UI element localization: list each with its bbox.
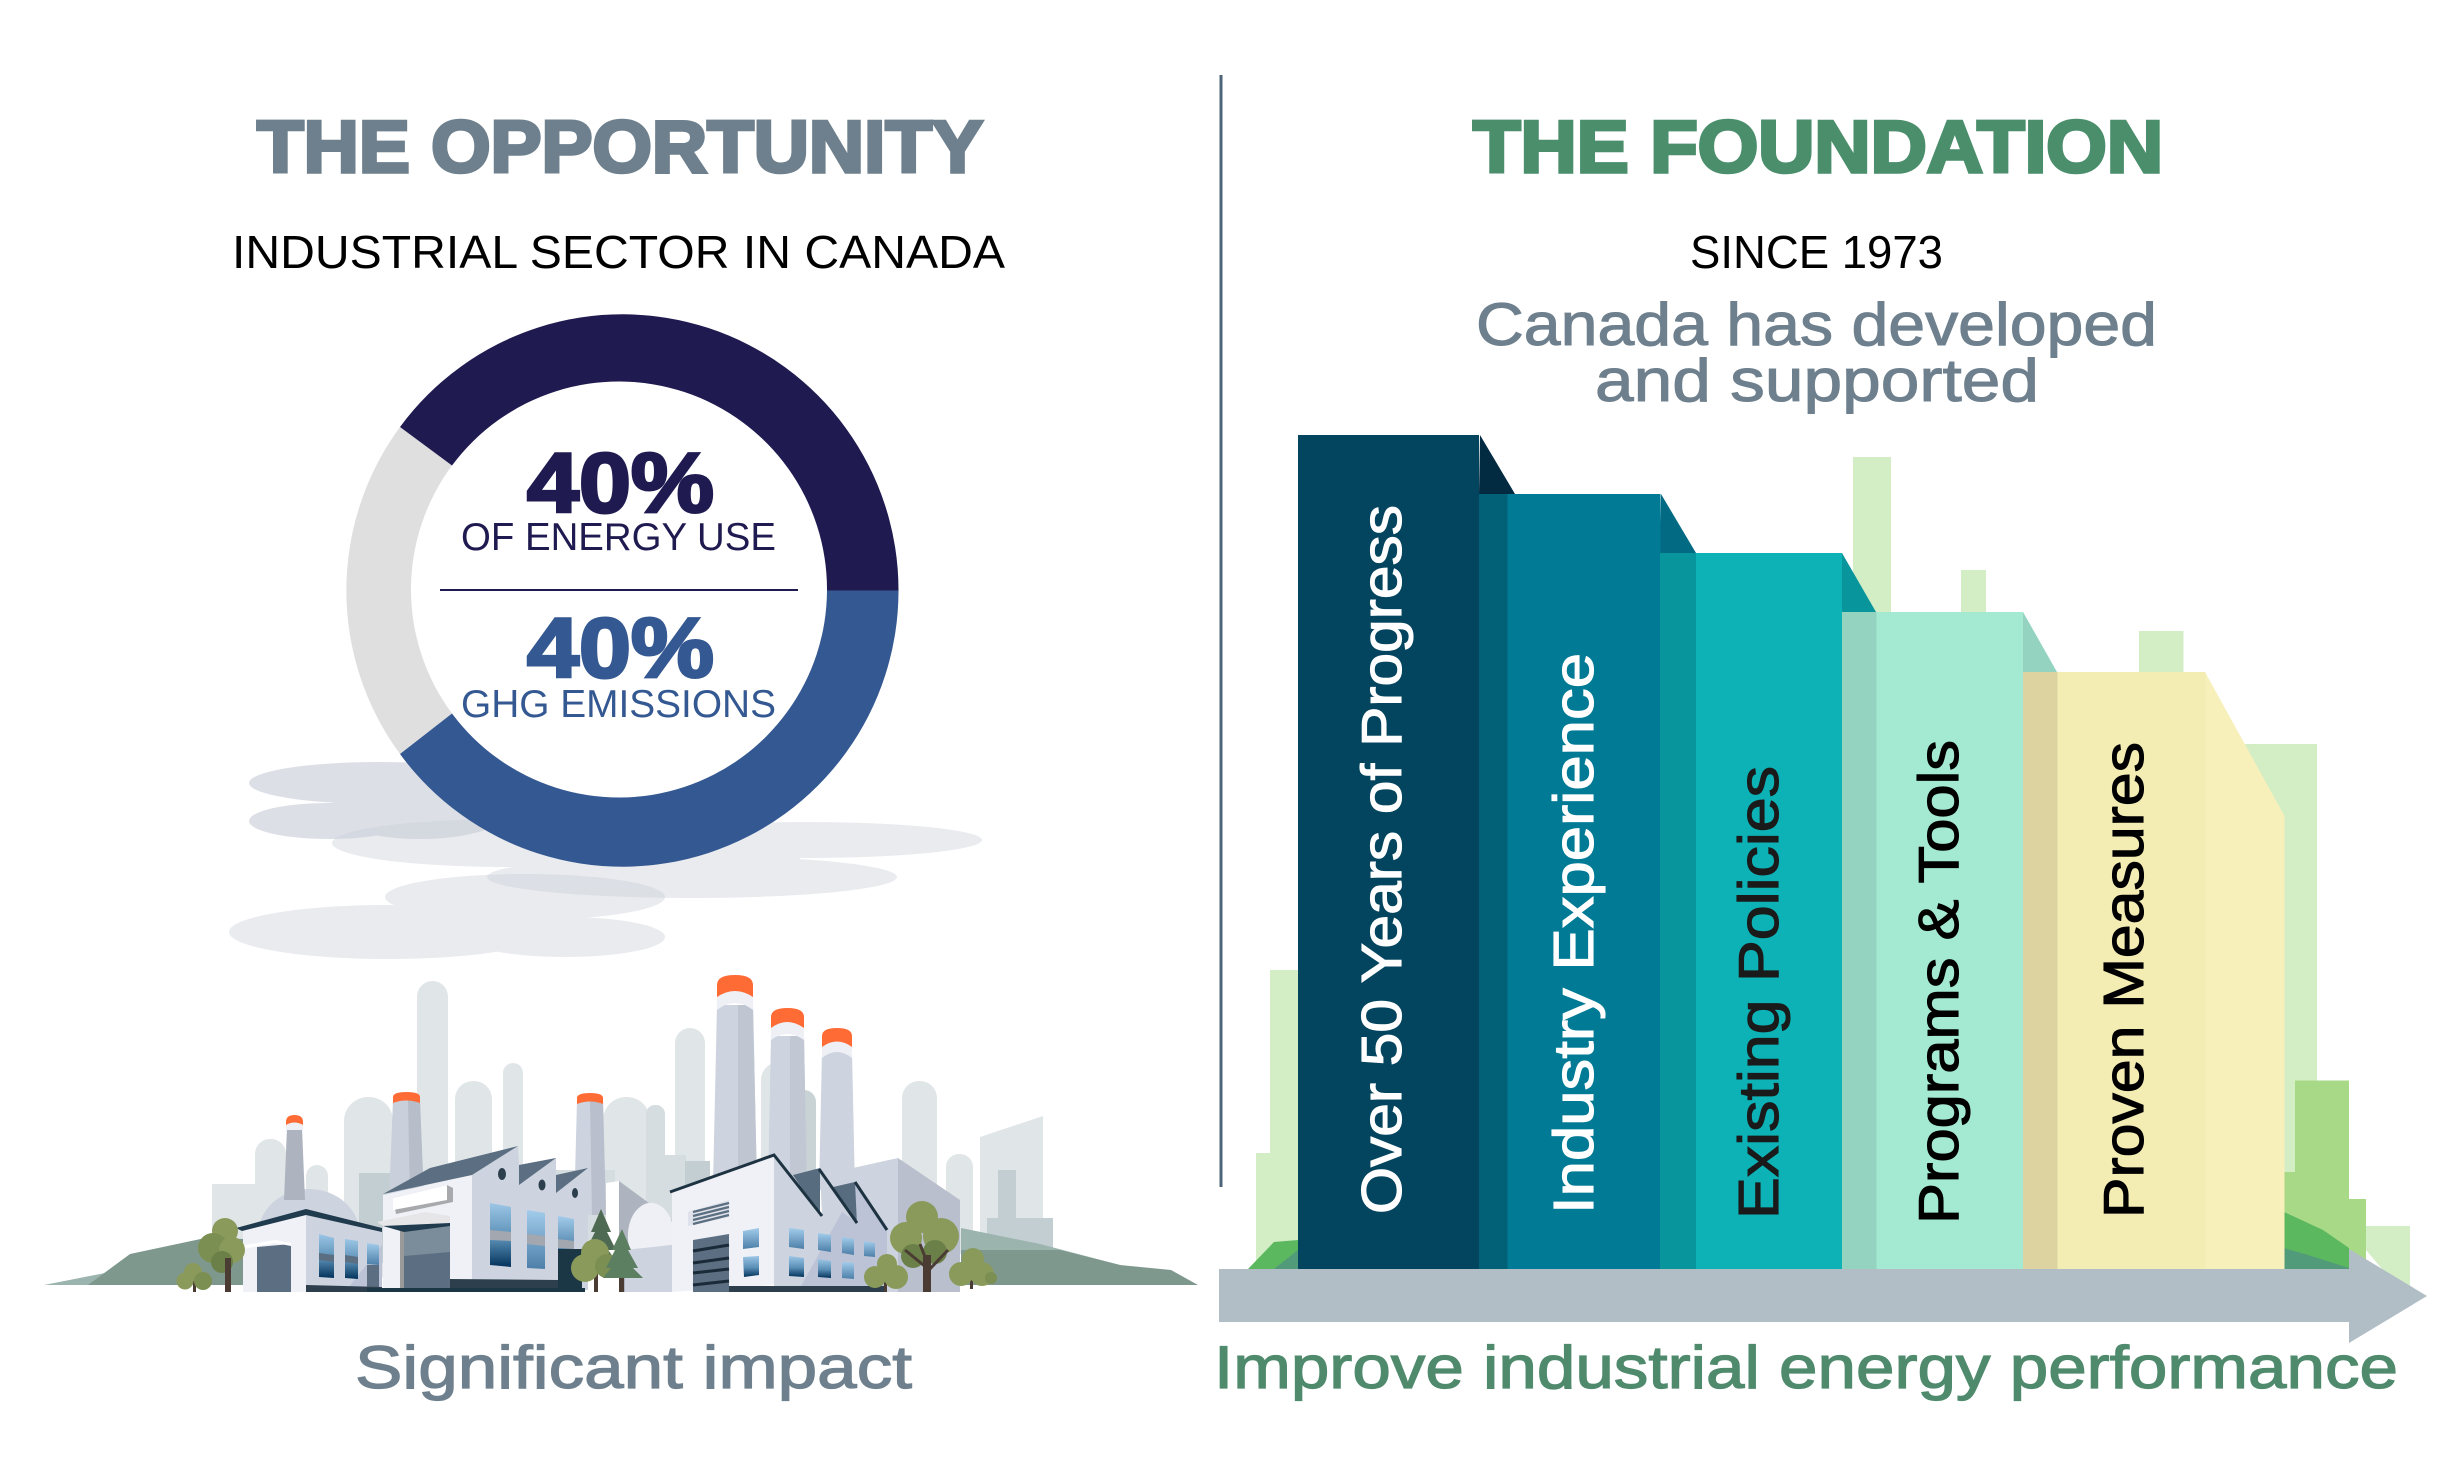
chimney left <box>389 1092 424 1200</box>
arrow: timeline <box>1219 1249 2427 1343</box>
books <box>1298 435 2284 1270</box>
grey shed behind <box>606 1181 672 1292</box>
middle tree <box>571 1239 619 1292</box>
book: Over 50 Years of Progress: Over 50 Years of Progress <box>1350 505 1414 1214</box>
statistic: 40 percent: 40% <box>527 436 714 530</box>
fir one <box>583 1209 617 1262</box>
caption: Improve industrial energy performance: Improve industrial energy performance <box>1214 1334 2398 1401</box>
background skyline <box>212 981 1053 1284</box>
heading: The Foundation: THE FOUNDATION <box>1473 107 2163 188</box>
donut segment: remainder <box>346 427 452 754</box>
right small tree B <box>949 1248 997 1289</box>
chimney tall three <box>819 1028 855 1190</box>
book: Existing Policies <box>1660 553 1876 1270</box>
label: of energy use: OF ENERGY USE <box>461 516 776 559</box>
background green skyline <box>1256 457 2410 1302</box>
fir two <box>603 1229 643 1292</box>
book: Programs and Tools <box>1842 612 2057 1270</box>
book: Over 50 Years of Progress <box>1298 435 1515 1270</box>
chimney tall one <box>713 975 757 1185</box>
small chimney <box>284 1115 305 1200</box>
caption: Significant impact: Significant impact <box>355 1334 912 1401</box>
left small tree <box>176 1263 212 1292</box>
chimneys <box>284 975 855 1215</box>
trees and firs <box>176 1201 997 1292</box>
green hills behind books <box>1248 1212 2349 1272</box>
hills <box>44 1228 1198 1285</box>
book: Industry Experience: Industry Experience <box>1542 653 1606 1214</box>
intro text: and supported <box>1595 347 2039 414</box>
left big tree <box>198 1218 245 1292</box>
intro text: Canada has developed <box>1476 291 2157 358</box>
book: Programs and Tools: Programs & Tools <box>1907 740 1971 1224</box>
chimney middle <box>574 1093 606 1215</box>
building left <box>236 1209 382 1292</box>
divider <box>1220 75 1222 1187</box>
book: Industry Experience <box>1479 494 1696 1270</box>
statistic: 40 percent emissions: 40% <box>527 601 714 695</box>
right small tree A <box>864 1254 908 1292</box>
smoke clouds <box>229 762 982 959</box>
dome <box>258 1189 360 1235</box>
book: Proven Measures: Proven Measures <box>2092 742 2156 1218</box>
right big tree <box>890 1201 959 1292</box>
back building right <box>835 1158 960 1292</box>
building main <box>367 1146 588 1292</box>
subheading: Since 1973: SINCE 1973 <box>1690 226 1943 278</box>
donut segment: energy use <box>400 314 899 590</box>
factory illustration <box>44 975 1198 1292</box>
book: Existing Policies: Existing Policies <box>1727 766 1791 1219</box>
label: GHG emissions: GHG EMISSIONS <box>461 683 776 726</box>
building right <box>670 1155 887 1292</box>
chimney tall two <box>768 1008 807 1190</box>
donut segment: GHG emissions <box>400 590 899 867</box>
donut chart: energy and emissions share <box>346 314 899 867</box>
heading: The Opportunity: THE OPPORTUNITY <box>257 107 983 188</box>
subheading: Industrial sector in Canada: INDUSTRIAL SECTOR IN CANADA <box>232 226 1005 278</box>
book: Proven Measures <box>2023 672 2284 1270</box>
intro text <box>1476 291 2157 414</box>
